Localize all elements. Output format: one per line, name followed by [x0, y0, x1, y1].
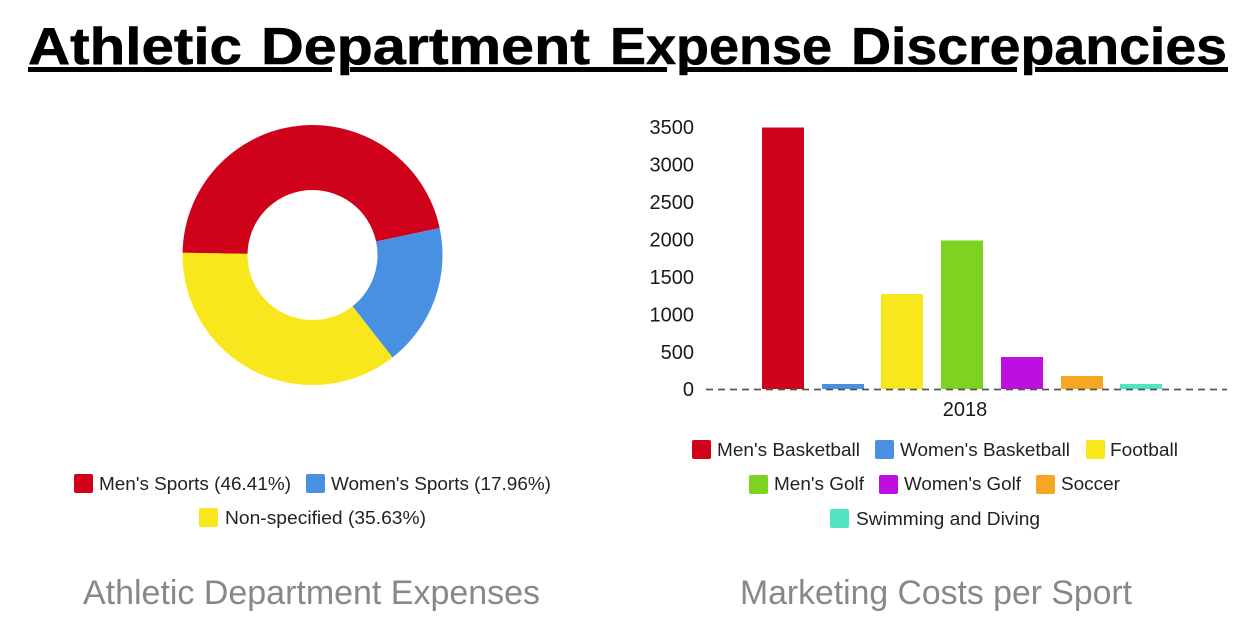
title: Expense — [610, 18, 832, 76]
x axis label: 2018 — [943, 399, 987, 421]
caption: marketing costs per sport: Marketing Costs per Sport — [740, 574, 1133, 612]
y axis labels — [650, 117, 694, 401]
legend: marketing costs — [692, 440, 1178, 529]
y axis labels: 3000 — [650, 154, 694, 176]
title: Department — [261, 18, 590, 76]
legend: expenses: Women's Sports (17.96%) — [331, 474, 551, 494]
caption: athletic department expenses: Athletic Department Expenses — [83, 574, 540, 612]
y axis labels: 3500 — [650, 117, 694, 139]
legend: marketing costs: Swimming and Diving — [856, 509, 1040, 529]
bars — [762, 128, 1162, 389]
legend: marketing costs: Men's Golf — [774, 474, 865, 494]
y axis labels: 500 — [661, 342, 694, 364]
legend: marketing costs: Men's Basketball — [717, 440, 860, 460]
legend: marketing costs: Football — [1110, 440, 1178, 460]
title — [28, 18, 1228, 76]
legend: marketing costs: Women's Golf — [904, 474, 1022, 494]
legend: expenses — [74, 474, 551, 528]
y axis labels: 2000 — [650, 230, 694, 252]
y axis labels: 1000 — [650, 304, 694, 326]
segment: non-specified — [183, 253, 393, 385]
bar chart: marketing costs — [650, 117, 1227, 421]
y axis labels: 1500 — [650, 267, 694, 289]
y axis labels: 0 — [683, 379, 694, 401]
segment: women's sports — [353, 228, 443, 357]
y axis labels: 2500 — [650, 192, 694, 214]
legend: marketing costs: Women's Basketball — [900, 440, 1070, 460]
legend: expenses: Non-specified (35.63%) — [225, 508, 426, 528]
title: Athletic — [28, 18, 242, 76]
legend: marketing costs: Soccer — [1061, 474, 1120, 494]
title: Discrepancies — [851, 18, 1227, 76]
segment: men's sports — [183, 125, 440, 254]
donut chart: athletic department expenses — [183, 125, 443, 385]
legend: expenses: Men's Sports (46.41%) — [99, 474, 291, 494]
